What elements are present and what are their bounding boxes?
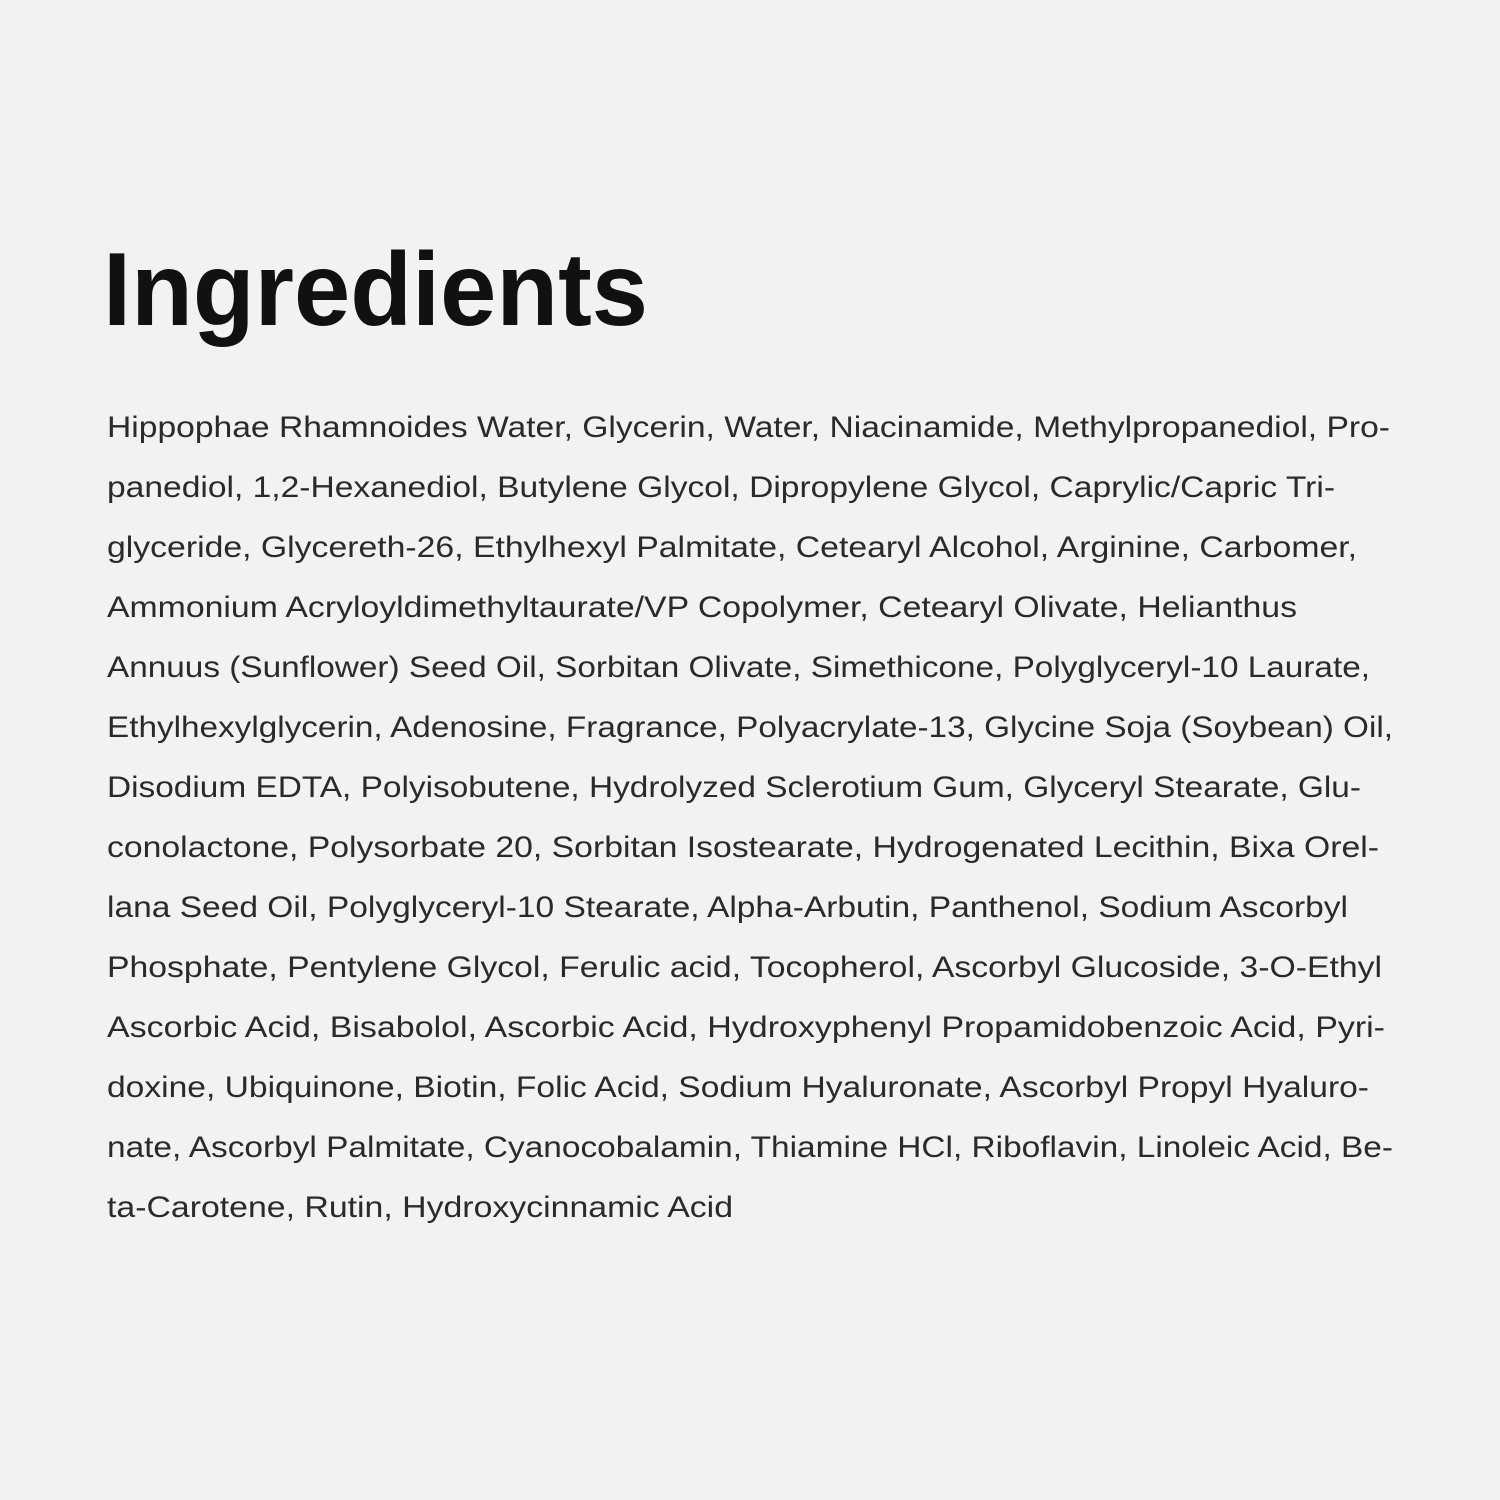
text block: ingredient list: nate, Ascorbyl Palmitate, Cyanocobalamin, Thiamine HCl, Riboflavin, Linoleic Acid, Be-: [107, 1131, 1393, 1164]
text block: ingredient list: conolactone, Polysorbate 20, Sorbitan Isostearate, Hydrogenated Lecithin, Bixa Orel-: [107, 831, 1379, 864]
text block: ingredient list: Disodium EDTA, Polyisobutene, Hydrolyzed Sclerotium Gum, Glyceryl Stearate, Glu-: [107, 771, 1361, 804]
text block: ingredient list: Ascorbic Acid, Bisabolol, Ascorbic Acid, Hydroxyphenyl Propamidobenzoic Acid, Pyri-: [107, 1011, 1385, 1044]
text block: ingredient list: ta-Carotene, Rutin, Hydroxycinnamic Acid: [107, 1191, 733, 1224]
title: Ingredients: [103, 232, 648, 348]
text block: ingredient list: lana Seed Oil, Polyglyceryl-10 Stearate, Alpha-Arbutin, Panthenol, Sodium Ascorbyl: [107, 891, 1348, 924]
text block: ingredient list: Ethylhexylglycerin, Adenosine, Fragrance, Polyacrylate-13, Glycine Soja (Soybean) Oil,: [107, 711, 1393, 744]
text block: ingredient list: Phosphate, Pentylene Glycol, Ferulic acid, Tocopherol, Ascorbyl Glucoside, 3-O-Ethyl: [107, 951, 1382, 984]
text block: ingredient list: glyceride, Glycereth-26, Ethylhexyl Palmitate, Cetearyl Alcohol, Arginine, Carbomer,: [107, 531, 1357, 564]
text block: ingredient list: doxine, Ubiquinone, Biotin, Folic Acid, Sodium Hyaluronate, Ascorbyl Propyl Hyaluro-: [107, 1071, 1369, 1104]
text block: ingredient list: Hippophae Rhamnoides Water, Glycerin, Water, Niacinamide, Methylpropanediol, Pro-: [107, 411, 1390, 444]
text block: ingredient list: Annuus (Sunflower) Seed Oil, Sorbitan Olivate, Simethicone, Polyglyceryl-10 Laurate,: [107, 651, 1370, 684]
text block: ingredient list: [107, 411, 1393, 1224]
text block: ingredient list: panediol, 1,2-Hexanediol, Butylene Glycol, Dipropylene Glycol, Caprylic/Capric Tri-: [107, 471, 1335, 504]
text block: ingredient list: Ammonium Acryloyldimethyltaurate/VP Copolymer, Cetearyl Olivate, Helianthus: [107, 591, 1297, 624]
